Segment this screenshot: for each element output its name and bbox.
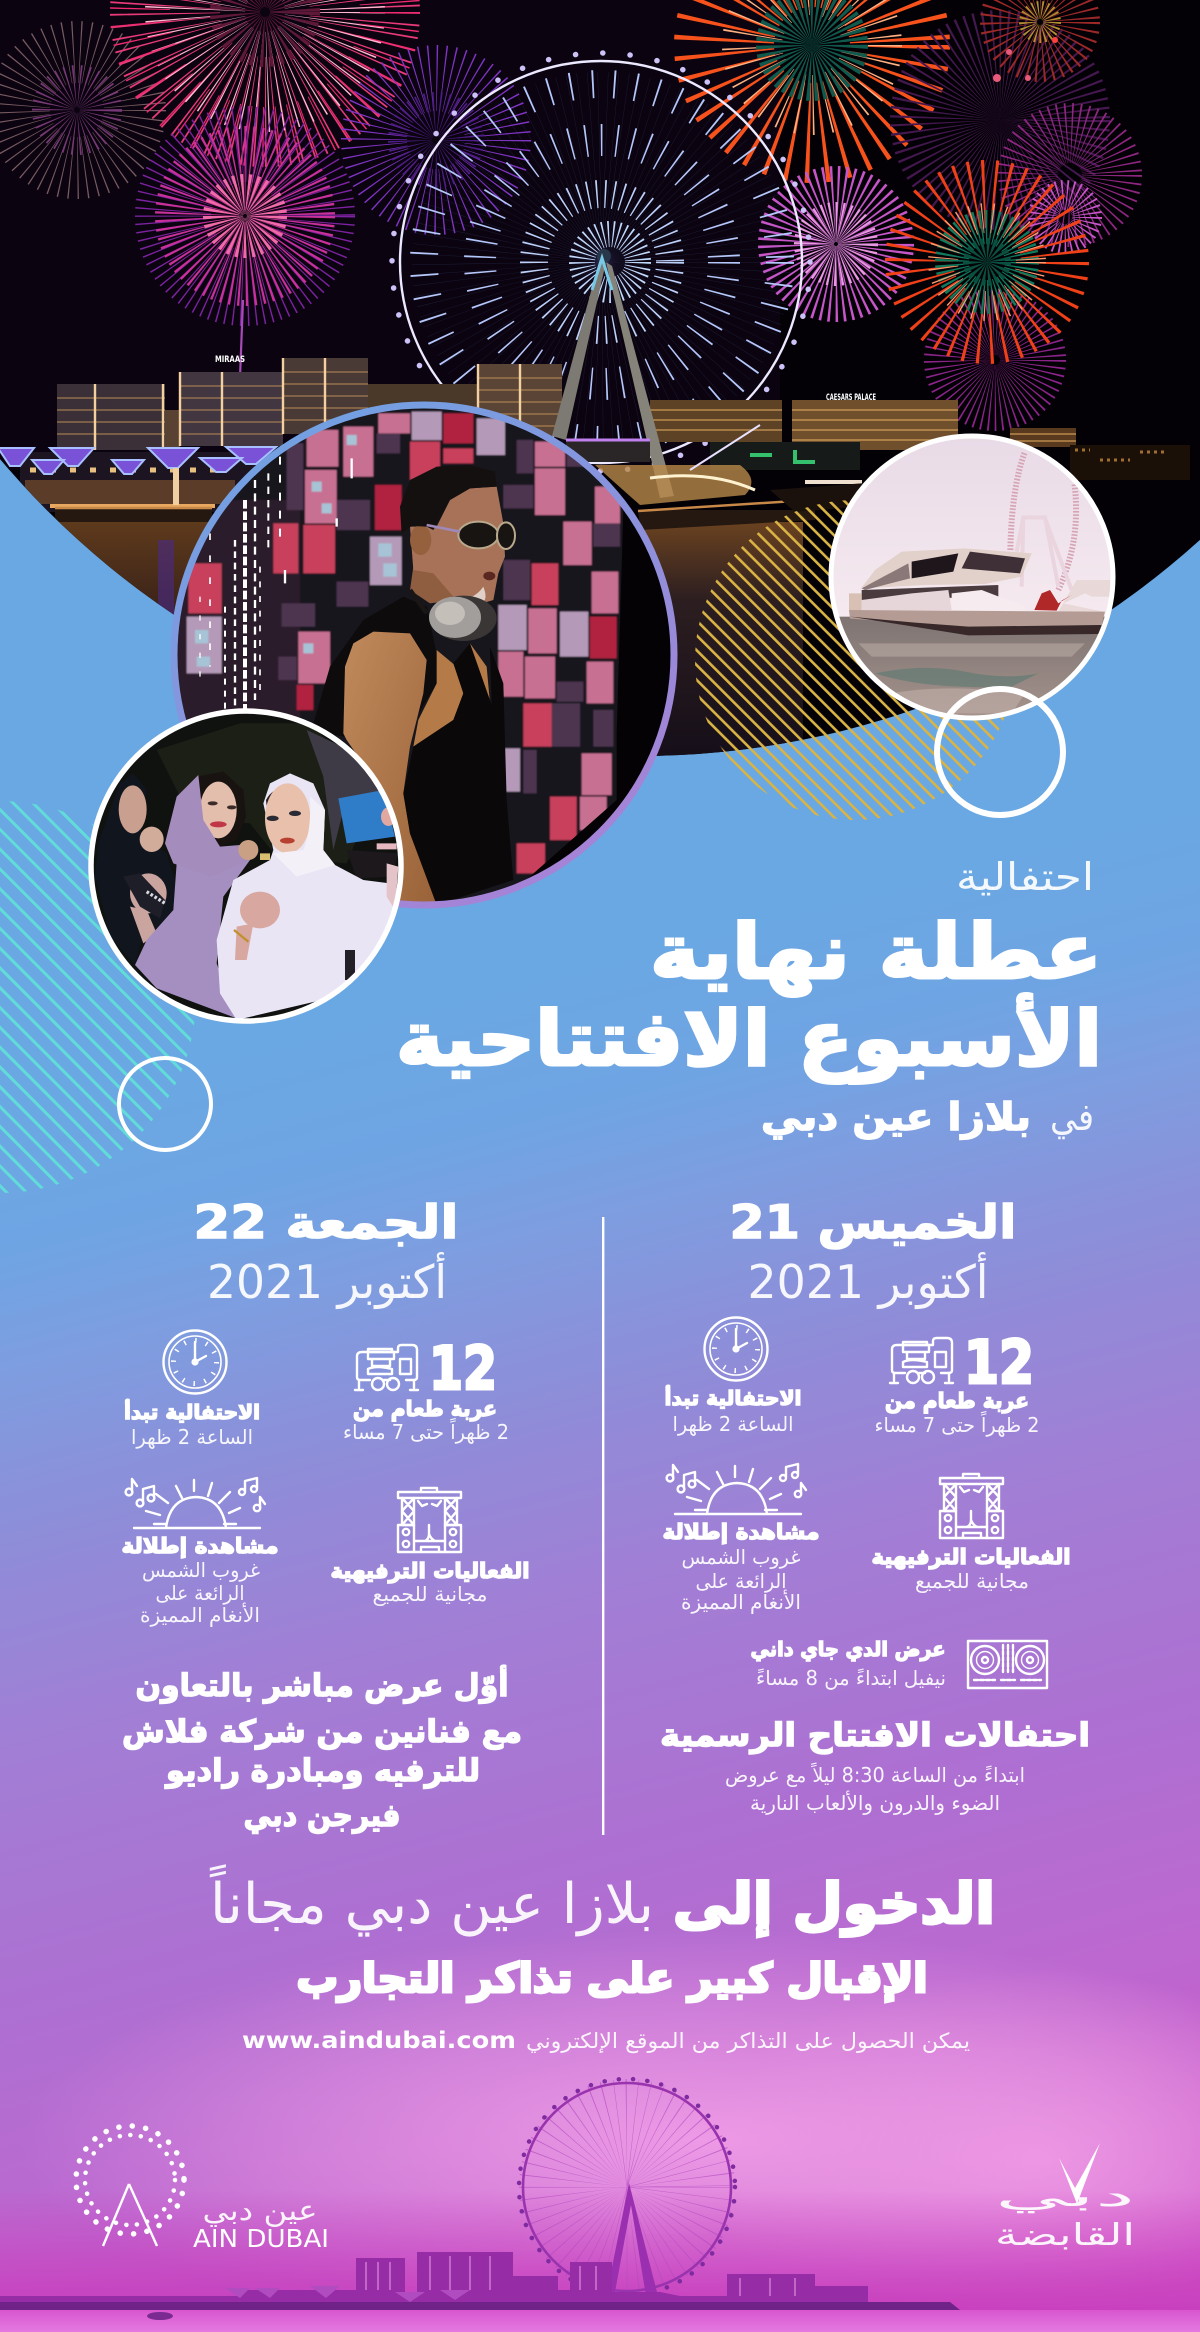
dj text bbox=[750, 1637, 946, 1690]
shore bbox=[55, 508, 815, 530]
entertainment text: الفعاليات الترفيهية bbox=[330, 1559, 530, 1583]
firework: trail bbox=[239, 300, 244, 372]
buildings silhouette bbox=[0, 2252, 950, 2310]
buildings left bbox=[57, 358, 562, 450]
icon: clock bbox=[164, 1330, 226, 1394]
icon: stage bbox=[398, 1488, 461, 1552]
start time text: الساعة 2 ظهرا bbox=[672, 1412, 794, 1436]
start time text: الاحتفالية تبدأ bbox=[664, 1384, 802, 1410]
man: neck bbox=[410, 567, 457, 603]
man: ear bbox=[410, 525, 431, 555]
food truck text: 2 ظهراً حتى 7 مساء bbox=[874, 1411, 1040, 1437]
tickets subheading: الإقبال كبير على تذاكر التجارب bbox=[296, 1956, 928, 2002]
led wall bbox=[170, 400, 627, 910]
food truck text: عربة طعام من bbox=[885, 1389, 1029, 1413]
man: chest bbox=[413, 643, 490, 747]
sunset text: الرائعة على bbox=[696, 1569, 786, 1593]
free entry headline: الدخول إلى bbox=[673, 1872, 995, 1937]
tickets website line: www.aindubai.com bbox=[242, 2028, 516, 2054]
firework: tan left bbox=[19, 52, 135, 168]
number 12: 12 bbox=[964, 1328, 1034, 1398]
tickets website line: يمكن الحصول على التذاكر من الموقع الإلكتروني bbox=[526, 2029, 970, 2053]
sunset text: الرائعة على bbox=[156, 1581, 244, 1605]
icon: food truck bbox=[355, 1345, 418, 1390]
man: face bbox=[410, 487, 505, 605]
food truck text bbox=[343, 1397, 509, 1444]
date heading: الخميس 21 bbox=[730, 1195, 1016, 1249]
Dubai Holding logo: دبي bbox=[995, 2179, 1135, 2214]
boat lower deck bbox=[849, 585, 1105, 635]
distant terminal bbox=[1058, 580, 1110, 612]
title block bbox=[396, 855, 1102, 1139]
man: hair bbox=[400, 465, 497, 533]
sunset text: غروب الشمس bbox=[682, 1545, 800, 1569]
CAESARS PALACE sign: CAESARS PALACE bbox=[826, 393, 876, 403]
start time text bbox=[124, 1398, 260, 1449]
entertainment text: مجانية للجميع bbox=[372, 1582, 488, 1606]
icon: food truck bbox=[890, 1338, 953, 1383]
gold hatch circle bbox=[695, 500, 1015, 820]
white ring left bbox=[119, 1058, 211, 1150]
food truck text bbox=[874, 1389, 1040, 1437]
icon: sunset with music bbox=[126, 1478, 265, 1528]
month year: أكتوبر 2021 bbox=[748, 1252, 988, 1310]
water reflection bbox=[59, 522, 803, 756]
firework: lower purple bbox=[957, 322, 1033, 398]
entertainment text bbox=[872, 1545, 1070, 1593]
MIRAAS sign: MIRAAS bbox=[215, 355, 245, 365]
buildings right bbox=[650, 400, 1190, 480]
water ripples bbox=[858, 643, 1085, 713]
entertainment text: الفعاليات الترفيهية bbox=[872, 1545, 1070, 1569]
sunset text bbox=[662, 1520, 820, 1614]
woman middle bbox=[135, 772, 258, 1018]
sunset text: مشاهدة إطلالة bbox=[122, 1534, 278, 1558]
wheel bbox=[392, 53, 810, 471]
opening ceremony text bbox=[725, 1762, 1025, 1815]
firework: top red bbox=[1008, 0, 1072, 54]
man: tank front bbox=[403, 643, 513, 905]
photo: dinner boat bbox=[825, 430, 1120, 727]
entertainment text: مجانية للجميع bbox=[915, 1569, 1029, 1593]
sunset text: غروب الشمس bbox=[142, 1558, 260, 1582]
opening ceremony text: الضوء والدرون والألعاب النارية bbox=[750, 1791, 1000, 1815]
logo arabic name: عين دبي bbox=[202, 2194, 318, 2227]
woman right bbox=[217, 773, 398, 1020]
firework: orange top bbox=[724, 0, 900, 133]
column divider bbox=[602, 1217, 604, 1835]
dj text: نيفيل ابتداءً من 8 مساءً bbox=[756, 1666, 946, 1690]
wheel in background bbox=[1010, 452, 1076, 590]
man: arm bbox=[343, 632, 437, 903]
Dubai Holding logo: القابضة bbox=[995, 2218, 1135, 2253]
firework: dim cluster bbox=[945, 65, 1055, 175]
icon: stage bbox=[940, 1474, 1003, 1538]
headline line two: الأسبوع الافتتاحية bbox=[396, 993, 1102, 1084]
sea bbox=[0, 2310, 1200, 2332]
man: black tank back bbox=[313, 597, 437, 737]
black right strip bbox=[528, 510, 627, 878]
backdrop bbox=[157, 723, 380, 863]
Ain Dubai wheel silhouette and skyline bbox=[0, 2079, 960, 2320]
kicker: احتفالية bbox=[956, 855, 1094, 899]
free entry headline bbox=[210, 1864, 995, 1937]
start time text: الساعة 2 ظهرا bbox=[131, 1425, 253, 1449]
bottom sky glow bbox=[0, 1930, 1200, 2332]
start time text: الاحتفالية تبدأ bbox=[124, 1398, 260, 1424]
food truck text: 2 ظهراً حتى 7 مساء bbox=[343, 1418, 509, 1444]
wheel legs bbox=[552, 249, 674, 498]
teal hatch circle bbox=[0, 801, 196, 1193]
firework: magenta bbox=[173, 144, 317, 288]
date heading: الجمعة 22 bbox=[194, 1195, 458, 1249]
man: headphones bbox=[410, 590, 497, 641]
firework: right purple bbox=[1028, 133, 1112, 239]
start time text bbox=[664, 1384, 802, 1436]
promenade and mushroom canopies bbox=[0, 447, 276, 512]
live show paragraph: فيرجن دبي bbox=[244, 1798, 400, 1834]
icon: clock bbox=[704, 1318, 768, 1380]
phone and hand bbox=[338, 790, 398, 878]
dj text: عرض الدي جاي داني bbox=[750, 1637, 946, 1662]
base terminal bbox=[566, 440, 880, 512]
panel: Friday 22 October bbox=[122, 1195, 530, 1834]
sunset text bbox=[122, 1534, 278, 1627]
icon: sunset with music bbox=[667, 1464, 806, 1514]
firework: purple bbox=[374, 78, 498, 202]
firework: orange green bbox=[919, 194, 1055, 330]
firework: big pink bbox=[140, 0, 390, 137]
live show paragraph: للترفيه ومبادرة راديو bbox=[164, 1753, 480, 1789]
location: بلازا عين دبي bbox=[761, 1095, 1031, 1139]
photo: DJ performer bbox=[170, 400, 683, 910]
man: sunglasses bbox=[427, 522, 515, 549]
live show paragraph: مع فنانين من شركة فلاش bbox=[122, 1714, 522, 1750]
firework: pink right of wheel bbox=[796, 204, 876, 284]
number 12: 12 bbox=[429, 1334, 497, 1404]
opening ceremony heading: احتفالات الافتتاح الرسمية bbox=[660, 1716, 1090, 1754]
live show paragraph: أوّل عرض مباشر بالتعاون bbox=[136, 1665, 508, 1704]
entertainment text bbox=[330, 1559, 530, 1606]
sunset text: الأنغام المميزة bbox=[681, 1590, 801, 1614]
location: في bbox=[1050, 1095, 1094, 1139]
Ain Dubai logo bbox=[76, 2126, 329, 2253]
free entry headline: بلازا عين دبي مجاناً bbox=[210, 1864, 654, 1937]
headline line one: عطلة نهاية bbox=[650, 907, 1102, 997]
white ring right bbox=[937, 689, 1063, 815]
sunset text: مشاهدة إطلالة bbox=[662, 1520, 820, 1544]
tickets website line bbox=[242, 2028, 970, 2054]
month year: أكتوبر 2021 bbox=[207, 1252, 447, 1310]
food truck text: عربة طعام من bbox=[353, 1397, 497, 1421]
wheel silhouette bbox=[519, 2079, 735, 2296]
woman left bbox=[95, 773, 178, 965]
logo latin name: AIN DUBAI bbox=[193, 2224, 329, 2253]
photo: three women bbox=[91, 711, 401, 1021]
icon: dj decks bbox=[968, 1641, 1047, 1688]
panel: Thursday 21 October bbox=[660, 1195, 1090, 1815]
boat upper deck bbox=[861, 548, 1032, 590]
hero night photo: Ain Dubai with fireworks bbox=[0, 0, 1200, 782]
Dubai Holding logo bbox=[995, 2143, 1135, 2253]
live show paragraph bbox=[122, 1665, 522, 1834]
opening ceremony text: ابتداءً من الساعة 8:30 ليلاً مع عروض bbox=[725, 1762, 1025, 1787]
sunset text: الأنغام المميزة bbox=[140, 1603, 260, 1627]
sparks bbox=[200, 457, 352, 710]
